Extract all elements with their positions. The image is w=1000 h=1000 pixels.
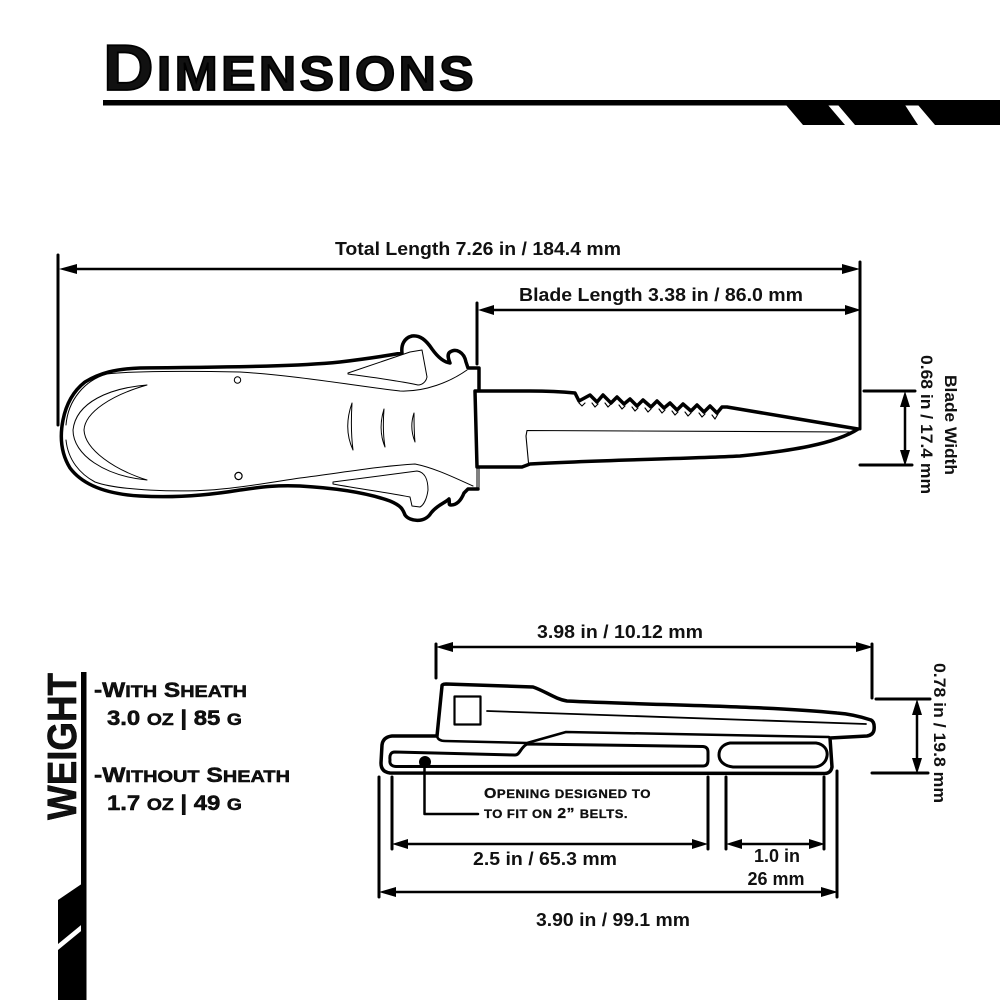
header rule with stripes [103,100,1000,125]
sheath lower dimensions: 2.5 in / 65.3 mm [473,849,617,869]
weight heading: WEIGHT [39,673,85,820]
belt opening callout [419,756,651,822]
blade width dimension: 0.68 in / 17.4 mm [917,355,936,494]
sheath width dimension: 0.78 in / 19.8 mm [930,663,948,803]
title: DIMENSIONS [103,31,477,104]
weight values: -W ITH SHEATH [94,679,247,702]
sheath drawing [381,684,874,774]
belt opening callout: TO FIT ON 2” BELTS. [484,806,628,822]
sheath lower dimensions [379,771,838,930]
knife blade [475,391,858,467]
weight side rule with stripes [58,672,86,1000]
blade width dimension: Blade Width [941,375,960,475]
weight values: 3.0 OZ | 85 G [107,707,242,730]
total length dimension: Total Length 7.26 in / 184.4 mm [335,239,621,259]
blade length dimension: Blade Length 3.38 in / 86.0 mm [519,285,803,305]
belt opening callout: OPENING DESIGNED TO [484,786,651,802]
weight values: 1.7 OZ | 49 G [107,792,242,815]
sheath lower dimensions: 1.0 in [754,846,800,866]
sheath width dimension [436,622,948,803]
knife handle [61,336,479,520]
sheath lower dimensions: 3.90 in / 99.1 mm [536,910,690,930]
weight values [94,679,290,815]
total length dimension [58,239,860,429]
blade width dimension [860,355,960,494]
blade length dimension [477,285,861,364]
weight values: -W ITHOUT SHEATH [94,764,290,787]
sheath lower dimensions: 26 mm [747,869,805,889]
sheath width dimension: 3.98 in / 10.12 mm [537,622,703,642]
